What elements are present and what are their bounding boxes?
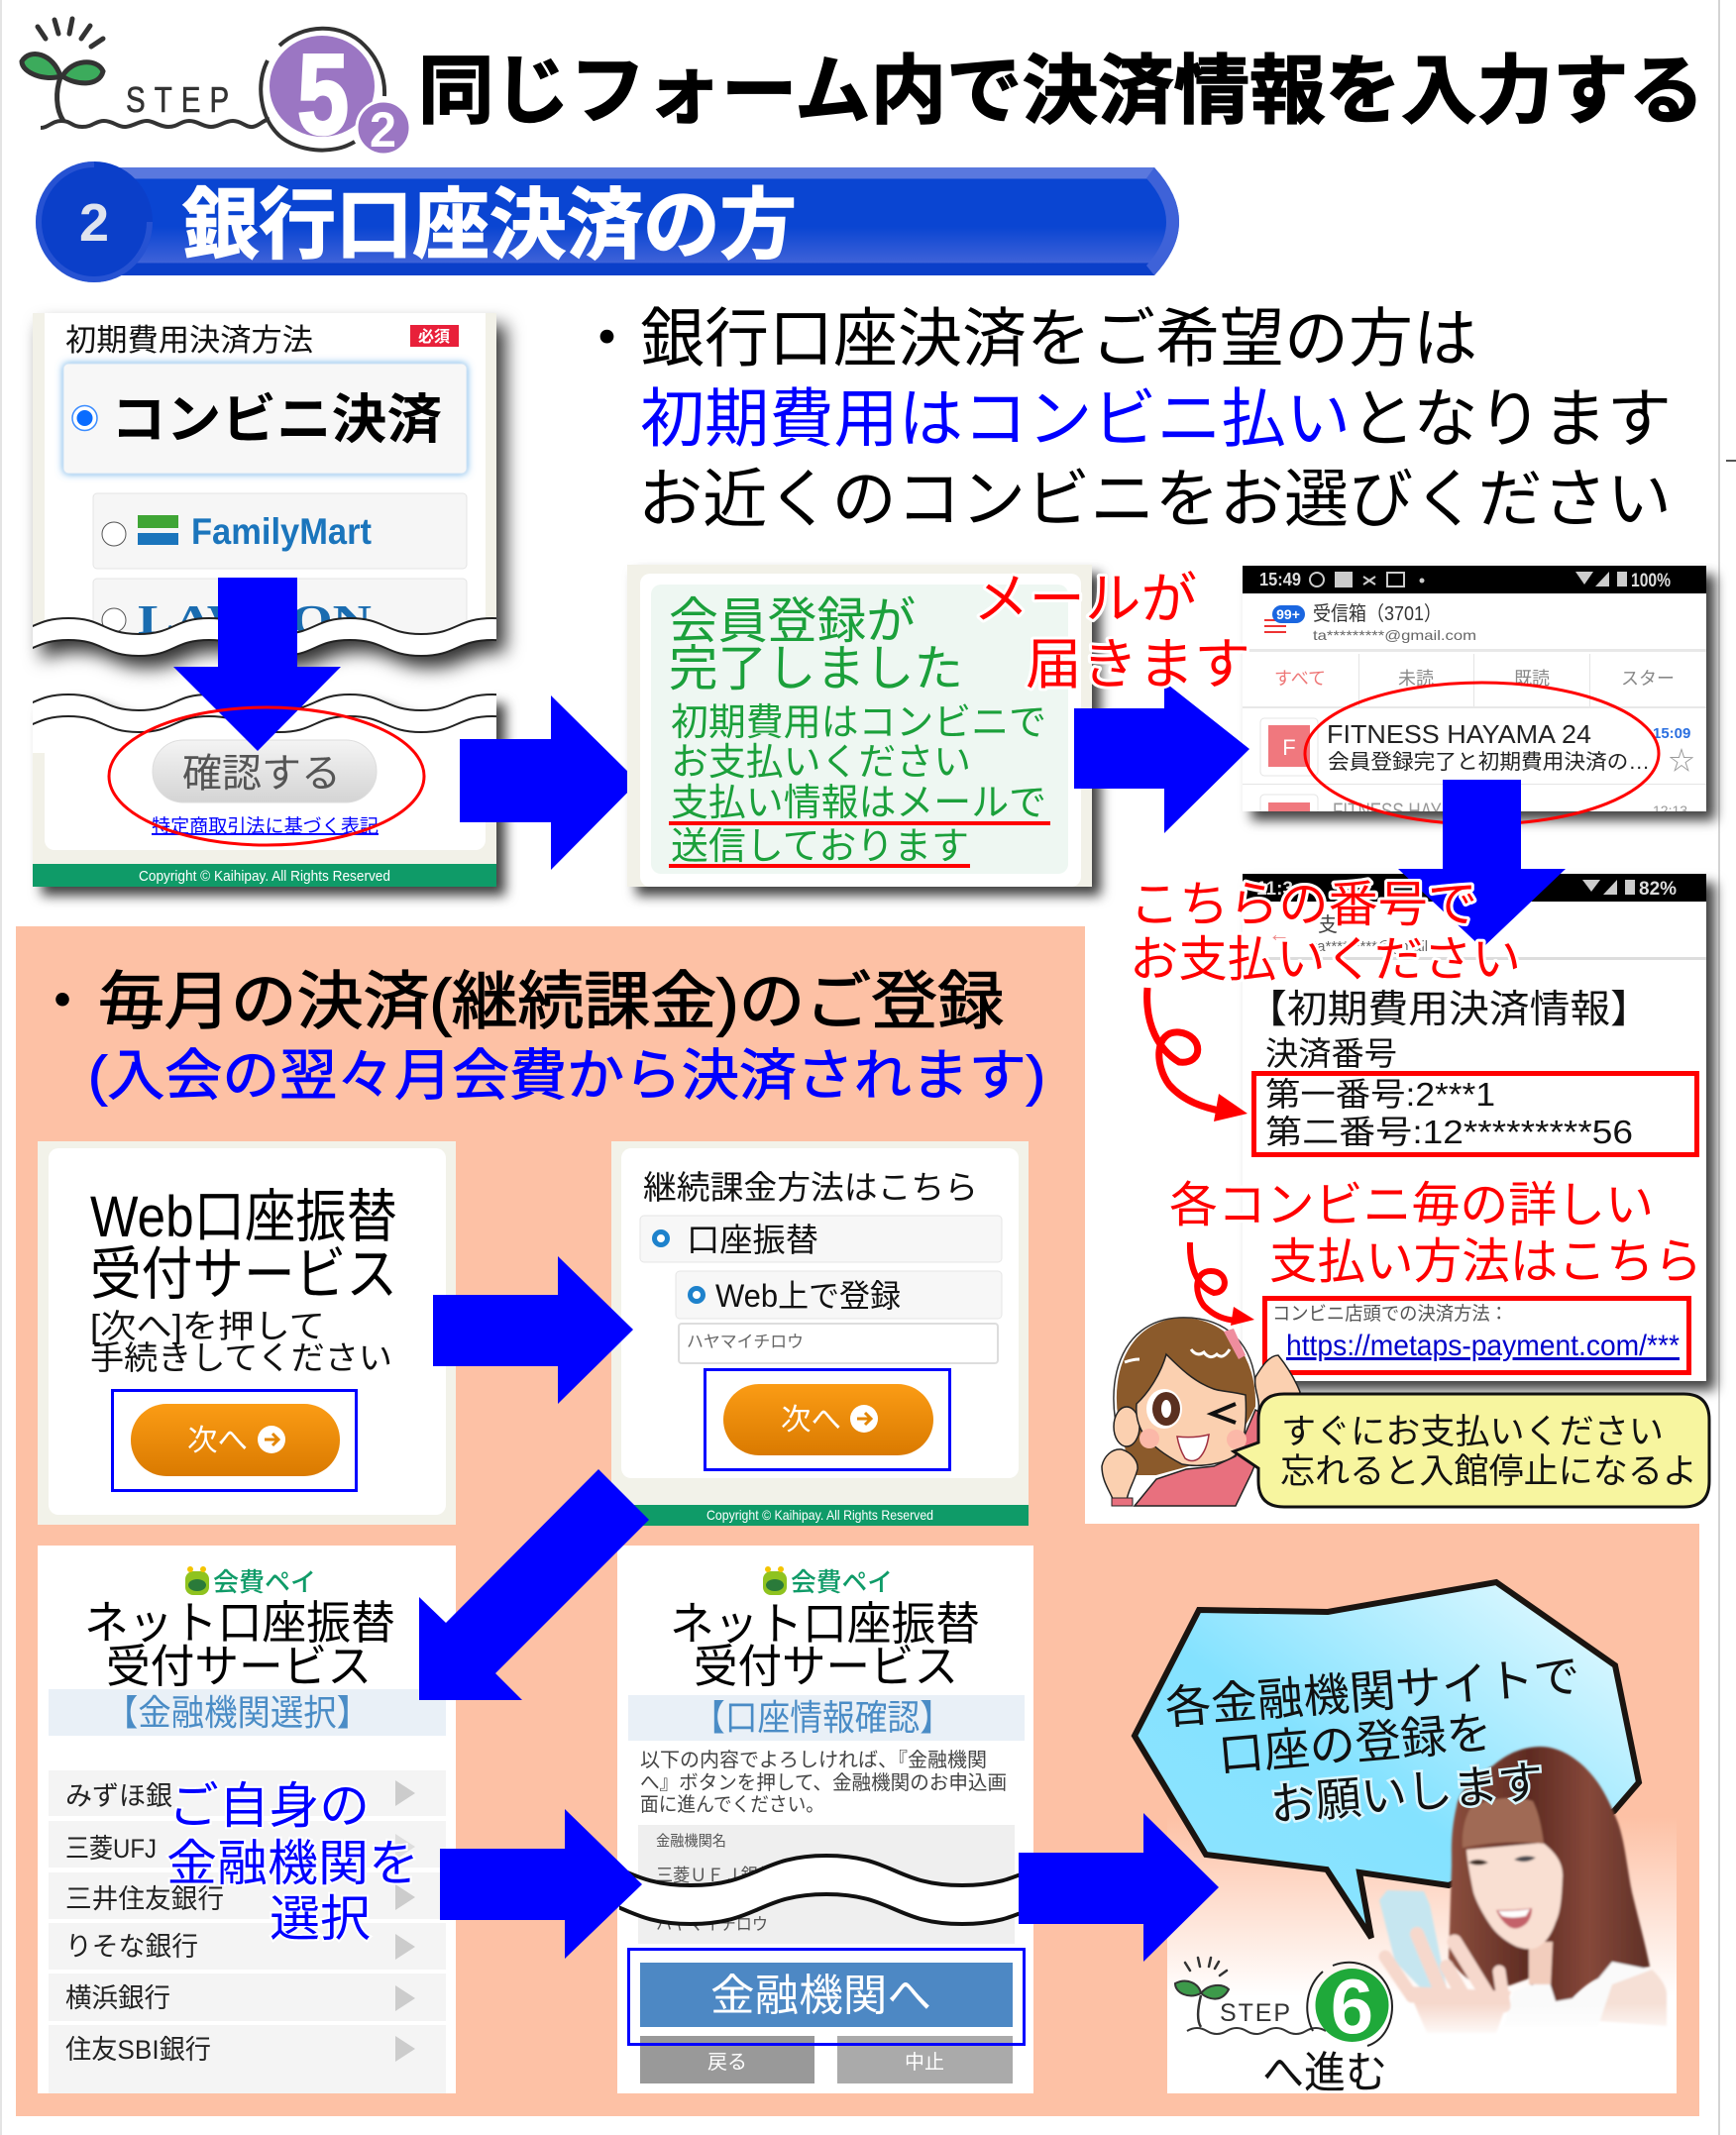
panel: recurring payment method screen: Copyright © Kaihipay. All Rights Reserved <box>706 1507 933 1523</box>
icon: STEP 5-2 sprout badge: 2 <box>370 102 396 158</box>
panel: registration complete screen <box>627 565 1092 887</box>
callout: pay with this number: お支払いください <box>1130 933 1521 987</box>
speech bubble: 口座の登録を <box>1216 1706 1494 1781</box>
icon: STEP 5-2 sprout badge <box>22 19 410 159</box>
panel: registration complete screen: 完了しました <box>669 641 963 696</box>
arrow: right between web screens <box>433 1256 633 1404</box>
arrow: right to confirmation screen <box>440 1809 642 1959</box>
woman with smartphone <box>1379 1747 1667 2033</box>
panel: web account transfer screen: [次へ]を押して <box>90 1308 325 1344</box>
callout: choose your bank: 選択 <box>270 1891 371 1947</box>
panel: gmail inbox screenshot: ta*********@gmail.com <box>1313 627 1476 643</box>
arrow: down from form <box>173 578 341 751</box>
lower form piece: 確認する <box>182 752 341 796</box>
callout: red ellipse on confirm button <box>109 707 424 845</box>
heading: monthly payment registration <box>31 966 1045 1107</box>
bank list: 三井住友銀行 <box>65 1884 224 1914</box>
panel: account confirmation screen: 金融機関名 <box>656 1833 726 1850</box>
panel: recurring payment method screen: 継続課金方法はこちら <box>643 1169 978 1206</box>
panel: gmail inbox screenshot: FITNESS HAYAMA 24 <box>1327 719 1591 749</box>
panel: account confirmation screen: 【口座情報確認】 <box>693 1697 952 1738</box>
panel: gmail inbox screenshot: 99+ <box>1276 606 1300 622</box>
section banner: bank account payment: 銀行口座決済の方 <box>182 181 797 268</box>
panel: account confirmation screen: 以下の内容でよろしければ、『金融機関 <box>640 1749 987 1771</box>
text block: bank payment note <box>575 302 1672 535</box>
callout: mail arrives: 届きます <box>1026 633 1250 695</box>
callout: details per convenience store: 各コンビニ毎の詳しい <box>1169 1179 1654 1232</box>
panel: gmail inbox screenshot <box>1243 566 1706 824</box>
panel: registration complete screen: 送信しております <box>671 826 969 868</box>
panel: payment information email screenshot: 支 <box>1318 913 1338 936</box>
panel: gmail inbox screenshot: 12:13 <box>1653 802 1687 818</box>
heading: monthly payment registration: 毎月の決済(継続課金)のご登録 <box>98 966 1004 1037</box>
panel: payment information email screenshot: 第一番号:2***1 <box>1265 1076 1495 1113</box>
panel: payment information email screenshot: https://metaps-payment.com/*** <box>1286 1330 1680 1362</box>
panel: account confirmation screen <box>617 1546 1033 2093</box>
photo fade <box>1367 2003 1677 2039</box>
callout: details per convenience store <box>1169 1179 1702 1289</box>
upper form piece: LAWSON <box>138 598 372 644</box>
panel: gmail inbox screenshot: スター <box>1621 669 1675 689</box>
panel: recurring payment method screen <box>611 1141 1029 1526</box>
panel: payment information email screenshot: 第二番号:12*********56 <box>1265 1114 1633 1150</box>
panel: account confirmation screen: 中止 <box>905 2051 944 2074</box>
panel: recurring payment method screen: ハヤマイチロウ <box>687 1333 804 1351</box>
panel: web account transfer screen: Web口座振替 <box>90 1185 397 1249</box>
callout: choose your bank: 金融機関を <box>166 1836 419 1891</box>
upper form piece: 必須 <box>418 328 450 346</box>
panel: woman with phone and step 6 <box>1135 1582 1677 2097</box>
bank list: 三菱UFJ <box>65 1834 157 1864</box>
panel: account confirmation screen: 受付サービス <box>694 1641 958 1692</box>
bank list: 横浜銀行 <box>65 1983 170 2013</box>
logo: kaihipay: 会費ペイ <box>213 1567 316 1597</box>
panel: gmail inbox screenshot: F <box>1282 735 1296 760</box>
panel: account confirmation screen: 戻る <box>707 2052 747 2074</box>
callout: details per convenience store: 支払い方法はこちら <box>1269 1235 1702 1289</box>
heading: monthly payment registration: (入会の翌々月会費から決済されます) <box>88 1044 1045 1107</box>
panel: gmail inbox screenshot: 受信箱（3701） <box>1313 602 1442 625</box>
upper form piece <box>0 313 563 656</box>
callout: yellow reminder bubble <box>1234 1394 1709 1507</box>
callout: mail arrives <box>973 568 1250 695</box>
peach background panel <box>16 926 1699 2116</box>
panel: payment information email screenshot: 11:3 <box>1256 879 1293 900</box>
callout: choose your bank <box>166 1778 419 1947</box>
section banner: bank account payment: 2 <box>79 193 109 253</box>
panel: bank selection screen: 受付サービス <box>106 1641 372 1692</box>
icon: step 6 badge: へ進む <box>1262 2049 1387 2097</box>
panel: gmail inbox screenshot: 会員登録完了と初期費用決済の… <box>1328 751 1650 774</box>
callout: choose your bank: ご自身の <box>168 1778 370 1834</box>
text block: bank payment note: 銀行口座決済をご希望の方は <box>640 302 1477 374</box>
panel: account confirmation screen: 金融機関へ <box>710 1972 931 2020</box>
panel: gmail inbox screenshot: 15:49 <box>1259 570 1301 589</box>
icon: step 6 badge: 6 <box>1331 1963 1373 2050</box>
arrow: red curl to link <box>1190 1242 1254 1326</box>
panel: payment information email screenshot: 【初期費用決済情報】 <box>1247 989 1651 1031</box>
panel: registration complete screen: お支払いください <box>671 742 971 784</box>
arrow: right to inbox <box>1074 682 1249 833</box>
panel: gmail inbox screenshot: 100% <box>1631 571 1671 591</box>
bank list: 住友SBI銀行 <box>65 2035 211 2065</box>
panel: recurring payment method screen: Web上で登録 <box>715 1278 901 1314</box>
panel: payment information email screenshot <box>1243 874 1706 1381</box>
bank list: みずほ銀 <box>65 1781 172 1811</box>
panel: bank selection screen: 【金融機関選択】 <box>105 1692 370 1733</box>
bubble text over hair: お願いします <box>1267 1756 1546 1831</box>
heading: monthly payment registration: ・ <box>31 966 94 1037</box>
wave cut <box>619 1854 1019 1926</box>
bank list <box>49 1770 446 2093</box>
lower form piece: 特定商取引法に基づく表記 <box>152 815 379 837</box>
arrow: right to completion screen <box>460 695 638 870</box>
panel: bank selection screen: ネット口座振替 <box>84 1597 395 1649</box>
text block: bank payment note: お近くのコンビニをお選びください <box>638 463 1672 535</box>
panel: payment information email screenshot: コンビニ店頭での決済方法： <box>1272 1303 1508 1325</box>
panel: bank selection screen <box>38 1546 456 2093</box>
panel: web account transfer screen: 次へ <box>187 1425 248 1457</box>
speech bubble: 各金融機関サイトで <box>1163 1650 1581 1734</box>
arrow: red curl to numbers <box>1147 988 1248 1121</box>
panel: gmail inbox screenshot: すべて <box>1274 669 1326 689</box>
text block: bank payment note: 初期費用はコンビニ払いとなります <box>640 382 1672 455</box>
panel: convenience store selection form <box>0 313 563 887</box>
panel: registration complete screen: 初期費用はコンビニで <box>671 702 1046 744</box>
panel: gmail inbox screenshot: 15:09 <box>1653 725 1690 742</box>
upper form piece: FamilyMart <box>191 511 372 552</box>
icon: step 6 badge <box>1175 1958 1392 2097</box>
arrow: right to step 6 <box>1019 1813 1219 1962</box>
callout: red ellipse on email row <box>1305 683 1659 824</box>
panel: payment information email screenshot: ← <box>1268 921 1290 946</box>
icon: STEP 5-2 sprout badge: 5 <box>297 32 349 159</box>
speech bubble <box>1135 1582 1639 1938</box>
text block: bank payment note: ・ <box>575 302 639 374</box>
panel: payment information email screenshot: 決済番号 <box>1265 1035 1397 1072</box>
panel: account confirmation screen: 面に進んでください。 <box>640 1793 824 1816</box>
section banner: bank account payment <box>36 161 1179 282</box>
lower form piece: Copyright © Kaihipay. All Rights Reserved <box>139 868 390 885</box>
panel: account confirmation screen: 三菱ＵＦＪ銀行 <box>656 1866 775 1885</box>
callout: mail arrives: メールが <box>973 568 1197 630</box>
callout: pay with this number: こちらの番号で <box>1130 877 1477 932</box>
arrow: down to email <box>1398 780 1566 948</box>
panel: registration complete screen: 会員登録が <box>669 593 916 649</box>
icon: STEP 5-2 sprout badge: STEP <box>126 79 229 120</box>
panel: web account transfer screen: 受付サービス <box>90 1242 397 1307</box>
panel: web account transfer screen: 手続きしてください <box>90 1339 392 1376</box>
upper form piece: 初期費用決済方法 <box>65 323 313 358</box>
panel: payment information email screenshot: ta*********@gmail <box>1313 938 1428 955</box>
panel: web account transfer screen <box>38 1141 456 1525</box>
panel: gmail inbox screenshot: FITNESS HAY <box>1333 799 1442 823</box>
callout: yellow reminder bubble: 忘れると入館停止になるよ <box>1280 1452 1697 1491</box>
panel: recurring payment method screen: 次へ <box>781 1404 841 1437</box>
lower form piece <box>0 694 563 887</box>
panel: gmail inbox screenshot: 未読 <box>1398 669 1434 689</box>
panel: recurring payment method screen: 口座振替 <box>687 1222 818 1258</box>
icon: winking girl illustration <box>1102 1317 1300 1506</box>
panel: gmail inbox screenshot: 既読 <box>1514 669 1550 689</box>
icon: step 6 badge: STEP <box>1220 1999 1290 2027</box>
panel: account confirmation screen: へ』ボタンを押して、金融機関のお申込画 <box>640 1771 1007 1794</box>
bank list: りそな銀行 <box>65 1932 198 1962</box>
callout: pay with this number <box>1130 877 1521 987</box>
upper form piece: コンビニ決済 <box>111 390 442 450</box>
panel: account confirmation screen: ハヤマイチロウ <box>656 1915 768 1934</box>
logo: kaihipay: 会費ペイ <box>791 1567 893 1597</box>
title: 同じフォーム内で決済情報を入力する <box>418 50 1704 134</box>
panel: payment information email screenshot: 82% <box>1639 879 1677 900</box>
panel: account confirmation screen: ネット口座振替 <box>670 1598 980 1650</box>
arrow: diagonal down-left <box>419 1469 649 1700</box>
panel: registration complete screen: 支払い情報はメールで <box>671 783 1046 824</box>
panel: gmail inbox screenshot: ☆ <box>1669 746 1694 776</box>
callout: yellow reminder bubble: すぐにお支払いください <box>1281 1413 1664 1451</box>
